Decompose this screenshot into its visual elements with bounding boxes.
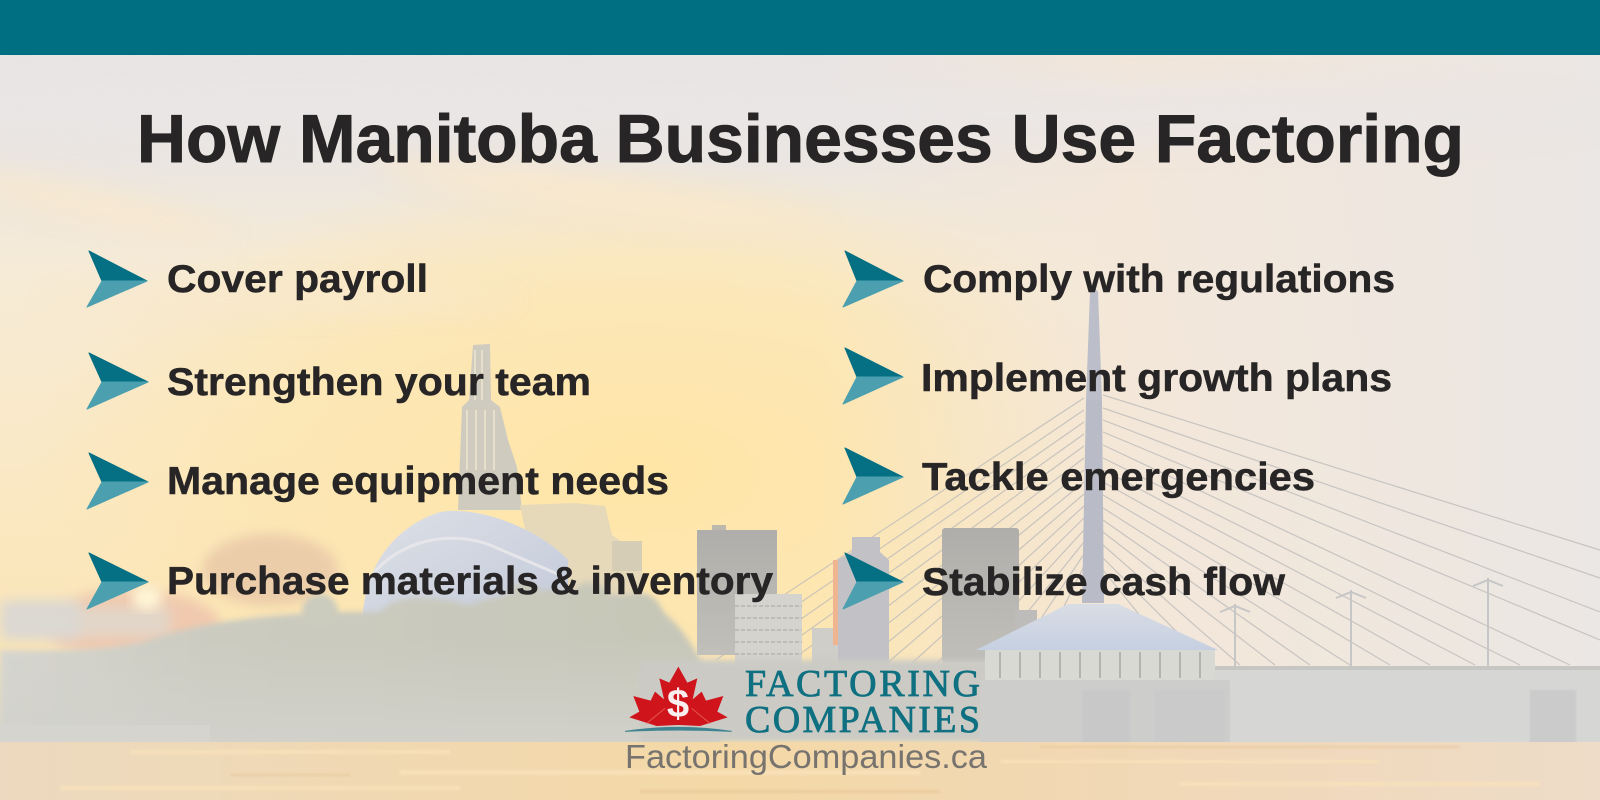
item: Tackle emergencies (843, 448, 1315, 504)
item: Cover payroll (87, 251, 428, 307)
icon: arrow (843, 348, 903, 404)
text: Tackle emergencies: Tackle emergencies (922, 456, 1315, 499)
icon: arrow (87, 453, 148, 509)
text: Cover payroll: Cover payroll (167, 258, 428, 301)
wordmark: COMPANIES: COMPANIES (745, 699, 980, 741)
text: Manage equipment needs: Manage equipment needs (167, 460, 669, 503)
icon: arrow (87, 353, 148, 409)
title: How Manitoba Businesses Use Factoring (137, 101, 1464, 177)
wordmark: FACTORING: FACTORING (745, 663, 980, 705)
item: Manage equipment needs (87, 453, 669, 509)
website url: FactoringCompanies.ca (625, 738, 988, 775)
downtown towers (697, 525, 1037, 674)
icon: red maple leaf with dollar sign: $ (667, 682, 689, 726)
river water (0, 742, 1600, 800)
text: Comply with regulations: Comply with regulations (923, 258, 1395, 301)
item: Purchase materials & inventory (87, 553, 773, 609)
icon: arrow (843, 553, 903, 609)
icon: arrow (843, 448, 903, 504)
Canadian Museum for Human Rights (362, 344, 642, 630)
icon: arrow (87, 553, 148, 609)
item: Strengthen your team (87, 353, 591, 409)
icon: arrow (843, 251, 903, 307)
top teal banner (0, 0, 1600, 55)
text: Strengthen your team: Strengthen your team (167, 361, 591, 404)
bridge deck and pavilion (640, 287, 1600, 748)
text: Implement growth plans: Implement growth plans (921, 357, 1392, 400)
left column list (87, 251, 773, 609)
item: Implement growth plans (843, 348, 1392, 404)
icon: arrow (87, 251, 147, 307)
text: Purchase materials & inventory: Purchase materials & inventory (167, 560, 773, 603)
item: Stabilize cash flow (843, 553, 1286, 609)
riverbank trees (0, 534, 720, 742)
text: Stabilize cash flow: Stabilize cash flow (922, 561, 1286, 604)
cable-stayed bridge cables (700, 395, 1600, 665)
logo: Factoring Companies (625, 663, 988, 775)
icon: red maple leaf with dollar sign (625, 667, 732, 731)
right column list (843, 251, 1395, 609)
item: Comply with regulations (843, 251, 1395, 307)
